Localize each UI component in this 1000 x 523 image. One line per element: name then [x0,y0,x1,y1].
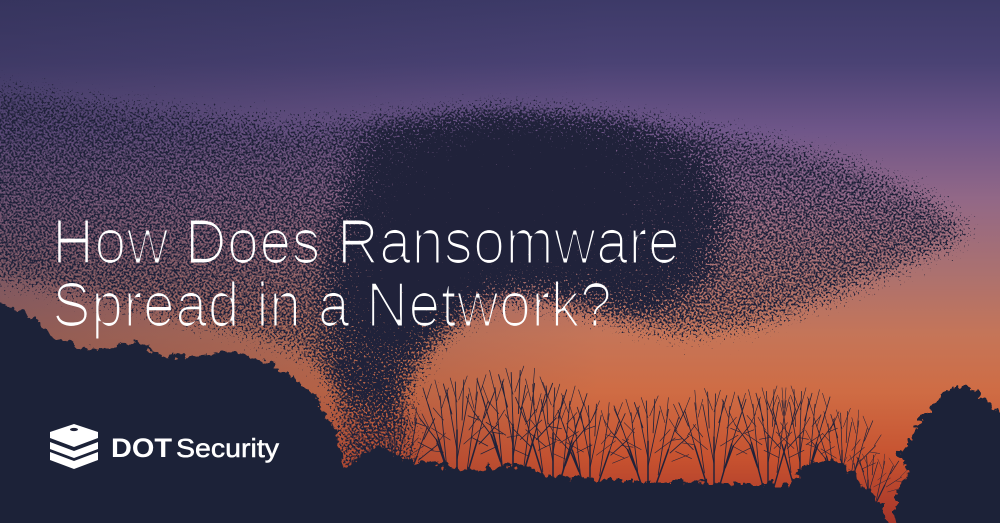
dark hillside and tree mass at left [0,297,365,523]
title [52,208,680,340]
icon: stacked layers [50,424,98,469]
title: How Does Ransomware [52,208,680,277]
bare winter trees [348,366,907,515]
logo: DOT Security [50,424,279,469]
conifer tree at right [895,385,1000,523]
wordmark: DOT [111,433,173,463]
logo: DOT Security: Security [176,433,279,463]
dark tree line along the ground [340,445,890,523]
title: Spread in a Network? [52,271,612,340]
